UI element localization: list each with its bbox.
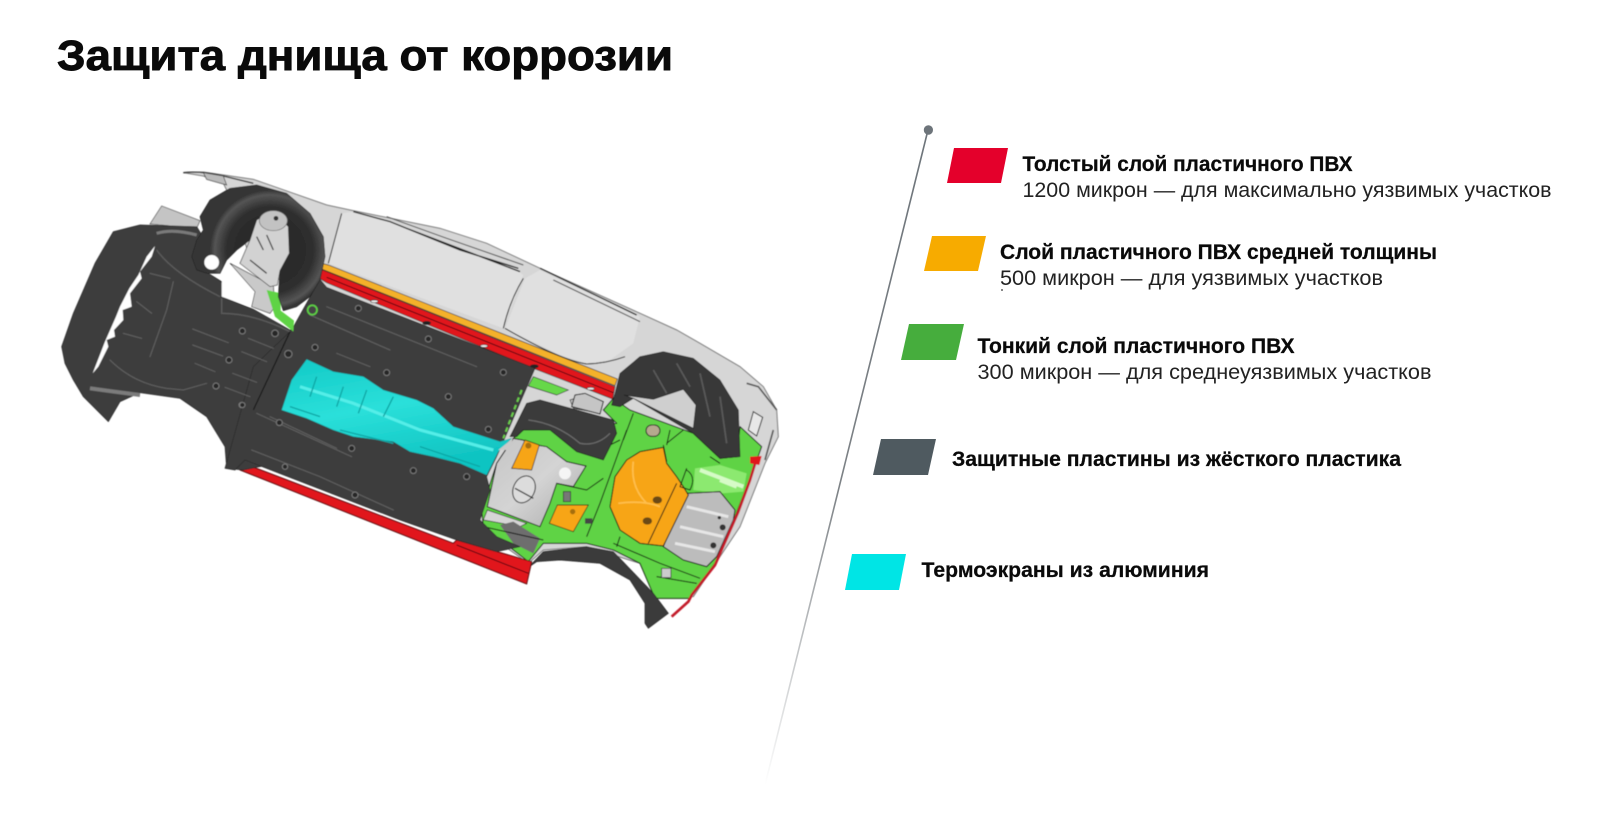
- bottom sill red: [240, 463, 532, 584]
- legend item: thick PVC: 1200 микрон — для максимально уязвимых участков: [1022, 179, 1552, 202]
- red strip: [320, 269, 615, 399]
- timeline line: [765, 125, 933, 785]
- grille opening: [93, 246, 155, 373]
- spoiler edge: [183, 172, 253, 183]
- aluminium heat shield: [282, 359, 512, 475]
- rear bracket: [572, 393, 603, 414]
- rear floor: [240, 352, 777, 628]
- legend item: aluminium heat shields: Термоэкраны из алюминия: [922, 559, 1209, 582]
- rear crossmember: [510, 400, 617, 460]
- front plate details and front wheel arch: [90, 172, 325, 410]
- legend item: medium PVC: [924, 236, 1437, 291]
- rear wheel arch: [612, 352, 740, 458]
- small orange patches: [512, 440, 539, 470]
- legend item: medium PVC: Слой пластичного ПВХ средней толщины: [1000, 241, 1437, 264]
- legend item: thin PVC: Тонкий слой пластичного ПВХ: [978, 335, 1294, 358]
- legend item: aluminium heat shields: [845, 554, 1209, 590]
- rear lower wheel arch: [528, 547, 668, 628]
- grey rear panel: [663, 492, 735, 567]
- legend item: plastic plates: Защитные пластины из жёсткого пластика: [952, 448, 1401, 471]
- body shell: [183, 172, 778, 597]
- green details: [646, 425, 660, 436]
- green patch by the sill: [528, 377, 568, 395]
- orange tank shield: [610, 447, 688, 546]
- rear bumper details: [748, 412, 763, 436]
- fasteners: [239, 305, 506, 498]
- suspension bracket: [230, 263, 275, 313]
- car underbody illustration: [62, 172, 778, 628]
- floor protective plates: [225, 279, 535, 552]
- opening behind the wheel arch: [222, 265, 255, 307]
- legend item: thick PVC: [947, 148, 1552, 202]
- legend item: thin PVC: [901, 324, 1432, 384]
- green thin PVC area: [482, 398, 762, 598]
- roof panels and sill strips: [320, 212, 640, 413]
- legend item: plastic plates: [873, 439, 1401, 475]
- rear edge red line: [672, 458, 757, 617]
- suspension strut: [240, 210, 289, 287]
- title: Защита днища от коррозии: [57, 32, 673, 80]
- legend item: medium PVC: 500 микрон — для уязвимых участков: [1000, 267, 1383, 290]
- grey floor pan: [487, 438, 586, 527]
- legend item: thin PVC: 300 микрон — для среднеуязвимых участков: [978, 361, 1432, 384]
- front bumper base: [62, 206, 340, 470]
- front bracket: [150, 206, 200, 228]
- legend item: thick PVC: Толстый слой пластичного ПВХ: [1022, 153, 1352, 176]
- green bracket: [267, 290, 294, 332]
- yellow strip: [322, 263, 617, 386]
- front wheel arch: [192, 185, 325, 311]
